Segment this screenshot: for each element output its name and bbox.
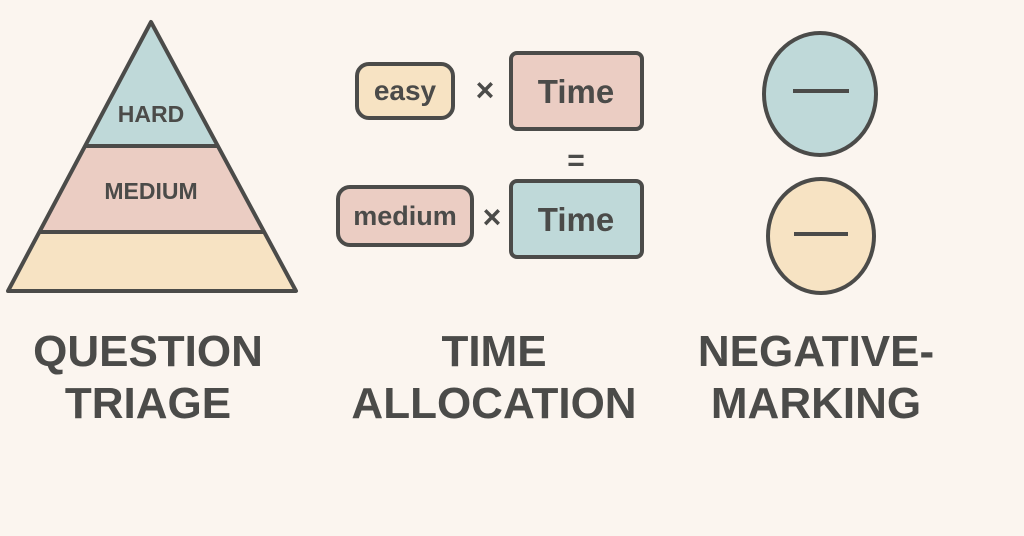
pyramid: question triage: HARD	[118, 101, 184, 127]
label: time allocation	[351, 327, 637, 428]
pyramid: question triage: MEDIUM	[104, 178, 198, 204]
equation: time allocation: medium	[353, 201, 457, 231]
label: negative-marking	[698, 327, 934, 428]
label: time allocation: TIME	[441, 327, 547, 376]
icons: minus circles	[764, 33, 876, 293]
equation: time allocation: Time	[538, 73, 614, 110]
equation: time allocation: easy	[374, 75, 437, 106]
equation: time allocation: Time	[538, 201, 614, 238]
label: negative-marking: MARKING	[711, 379, 921, 428]
equation: time allocation: ×	[476, 72, 494, 108]
equation: time allocation: ×	[483, 199, 501, 235]
label: question triage: TRIAGE	[65, 379, 231, 428]
equation: time allocation	[338, 53, 642, 257]
label: negative-marking: NEGATIVE-	[698, 327, 934, 376]
pyramid: question triage	[8, 22, 296, 291]
label: question triage	[33, 327, 263, 428]
label: time allocation: ALLOCATION	[351, 379, 637, 428]
label: question triage: QUESTION	[33, 327, 263, 376]
equation: time allocation: =	[567, 144, 585, 177]
